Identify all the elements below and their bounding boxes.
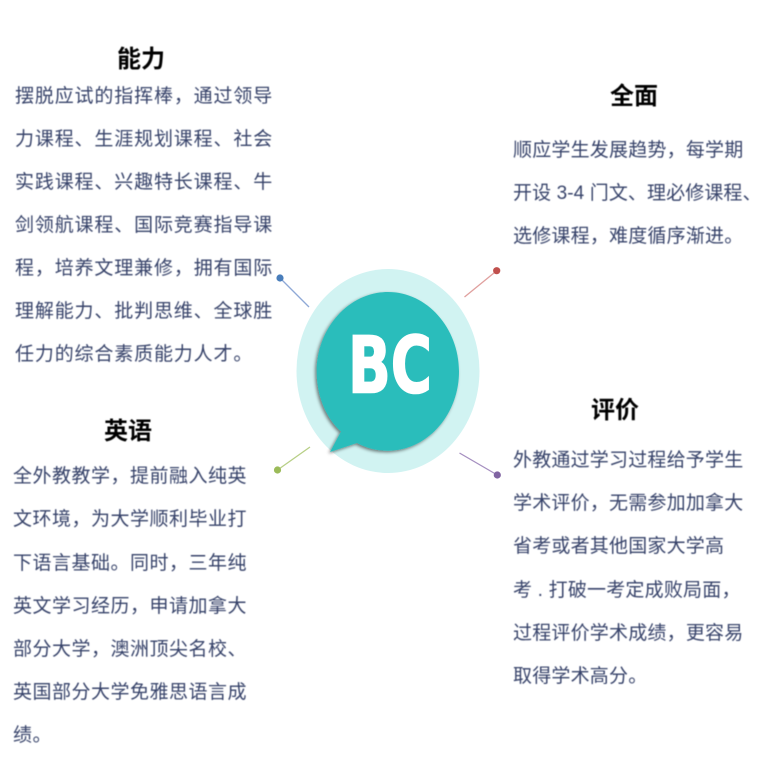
panel: 评价 text: 外教通过学习过程给予学生 (513, 450, 743, 471)
panel: 能力 text: 理解能力、批判思维、全球胜 (15, 301, 273, 322)
panel: 能力 text: 实践课程、兴趣特长课程、牛 (15, 172, 273, 193)
panel: 能力 text: 程，培养文理兼修，拥有国际 (15, 258, 273, 279)
panel: 全面 text: 开设 3-4 门文、理必修课程、 (513, 183, 762, 204)
outer pale halo (296, 269, 480, 473)
panel: 英语 heading: 英语 (104, 418, 152, 445)
panel: 全面 heading: 全面 (610, 83, 658, 110)
panel: 英语 text: 文环境，为大学顺利毕业打 (13, 509, 247, 530)
teal speech bubble (317, 292, 459, 452)
panel: 评价 text: 过程评价学术成绩，更容易 (513, 623, 743, 644)
panel: 能力 text: 力课程、生涯规划课程、社会 (15, 129, 273, 150)
panel: 英语 text: 英文学习经历，申请加拿大 (13, 596, 247, 617)
panel: 能力 text: 任力的综合素质能力人才。 (15, 344, 253, 365)
connector: purple (460, 453, 501, 479)
BC logo text: BC (348, 322, 432, 412)
panel: 评价 text: 省考或者其他国家大学高 (513, 536, 724, 557)
panel: 全面 text: 顺应学生发展趋势，每学期 (513, 140, 743, 161)
panel: 能力 text: 摆脱应试的指挥棒，通过领导 (15, 86, 273, 107)
panel: 全面 text (513, 139, 762, 247)
connector: red (464, 267, 500, 297)
panel: 能力 text: 剑领航课程、国际竞赛指导课 (15, 215, 273, 236)
panel: 英语 text (13, 465, 247, 746)
panel: 英语 text: 全外教教学，提前融入纯英 (13, 466, 247, 487)
connector: green (274, 447, 310, 474)
panel: 英语 text: 绩。 (13, 725, 52, 746)
panel: 评价 text: 考 . 打破一考定成败局面， (513, 580, 741, 601)
panel: 评价 text: 学术评价，无需参加加拿大 (513, 493, 743, 514)
panel: 英语 text: 下语言基础。同时，三年纯 (13, 553, 247, 574)
panel: 评价 text: 取得学术高分。 (513, 666, 647, 687)
panel: 英语 text: 英国部分大学免雅思语言成 (13, 682, 247, 703)
panel: 评价 heading: 评价 (591, 397, 639, 424)
panel: 英语 text: 部分大学，澳洲顶尖名校、 (13, 639, 247, 660)
panel: 能力 heading: 能力 (117, 46, 165, 73)
panel: 全面 text: 选修课程，难度循序渐进。 (513, 226, 743, 247)
panel: 能力 text (14, 85, 273, 365)
panel: 评价 text (513, 449, 743, 687)
connector: blue (276, 274, 309, 307)
